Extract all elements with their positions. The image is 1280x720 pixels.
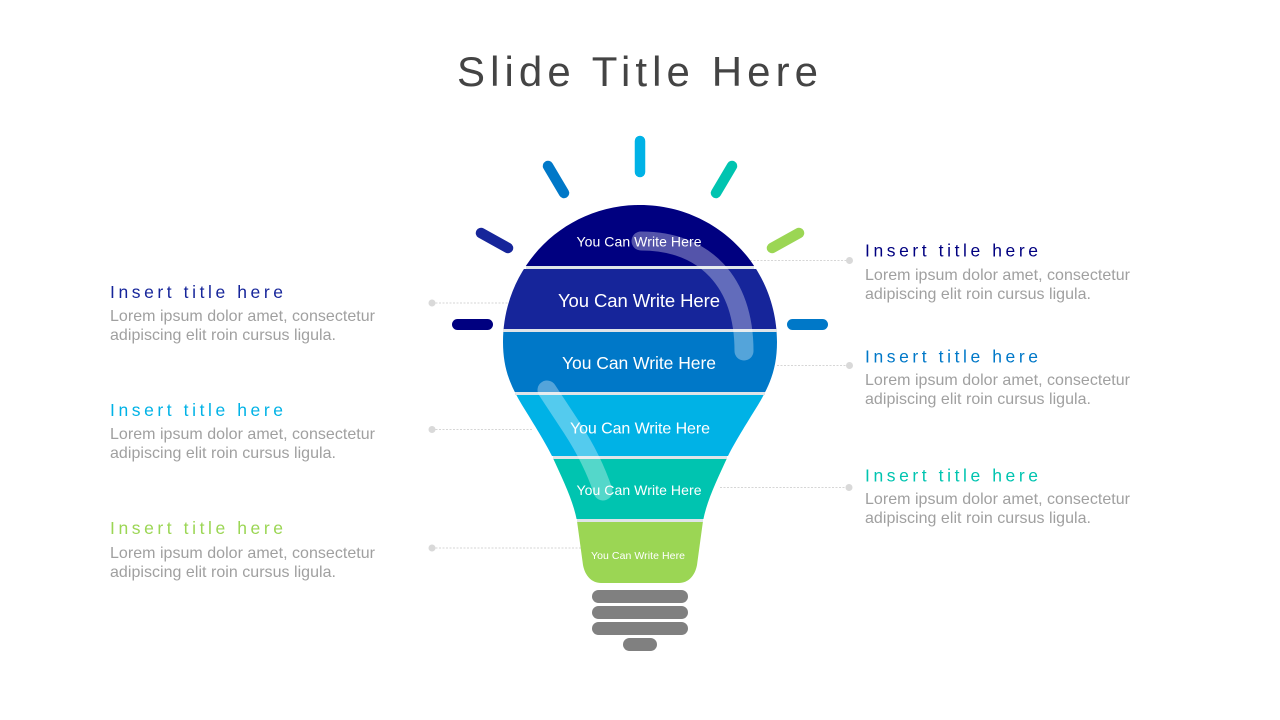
ray: left <box>458 319 488 330</box>
text block: right 1: Lorem ipsum dolor amet, consectetur <box>865 267 1131 284</box>
ray: top left <box>548 166 564 193</box>
text block: left 1: Insert title here <box>110 282 283 302</box>
light bulb <box>490 200 790 651</box>
text block: left 3: Lorem ipsum dolor amet, consectetur <box>110 545 376 562</box>
text block: left 3 <box>110 518 376 581</box>
text block: right 3: Lorem ipsum dolor amet, consectetur <box>865 491 1131 508</box>
text block: left 1: Lorem ipsum dolor amet, consectetur <box>110 308 376 325</box>
band 4 fill <box>516 395 764 456</box>
text block: right 1 <box>865 240 1131 303</box>
text block: right 3 <box>865 466 1131 527</box>
text block: left 1 <box>110 282 376 344</box>
text block: right 3: Insert title here <box>865 466 1038 486</box>
ray: top right <box>716 166 732 193</box>
text block: left 2: Insert title here <box>110 400 283 420</box>
ray: upper right <box>772 233 799 248</box>
rays <box>458 141 822 324</box>
ray: upper left <box>481 233 508 248</box>
title: Slide Title Here <box>457 48 818 95</box>
text block: right 2 <box>865 346 1131 408</box>
label 2: You Can Write Here <box>558 290 720 311</box>
band labels <box>558 234 720 562</box>
glass highlight: upper right <box>641 241 744 351</box>
ray: top <box>635 141 645 172</box>
label 5: You Can Write Here <box>576 482 702 498</box>
text block: right 2: adipiscing elit roin cursus ligula. <box>865 391 1091 408</box>
band 6 fill <box>577 522 703 583</box>
band separators <box>503 266 777 522</box>
label 6: You Can Write Here <box>591 550 685 562</box>
text block: right 1: adipiscing elit roin cursus ligula. <box>865 286 1091 303</box>
text block: left 2: Lorem ipsum dolor amet, consectetur <box>110 426 376 443</box>
label 1: You Can Write Here <box>576 234 702 250</box>
text block: right 1: Insert title here <box>865 240 1038 260</box>
label 3: You Can Write Here <box>562 353 716 373</box>
text block: right 2: Lorem ipsum dolor amet, consectetur <box>865 372 1131 389</box>
connector lines and dots <box>428 257 853 552</box>
band 5 fill <box>553 459 727 519</box>
text block: left 1: adipiscing elit roin cursus ligula. <box>110 327 336 344</box>
glass highlight: lower left <box>547 390 603 491</box>
text block: left 3: Insert title here <box>110 518 283 538</box>
text block: left 2 <box>110 400 376 462</box>
text block: right 3: adipiscing elit roin cursus ligula. <box>865 510 1091 527</box>
band 1 fill <box>526 205 754 266</box>
text block: left 3: adipiscing elit roin cursus ligula. <box>110 564 336 581</box>
band 2 fill <box>490 269 790 329</box>
band 3 fill <box>490 332 790 392</box>
label 4: You Can Write Here <box>570 420 710 438</box>
bulb base <box>592 590 688 651</box>
text block: left 2: adipiscing elit roin cursus ligula. <box>110 445 336 462</box>
ray: right <box>792 319 822 330</box>
text block: right 2: Insert title here <box>865 346 1038 366</box>
